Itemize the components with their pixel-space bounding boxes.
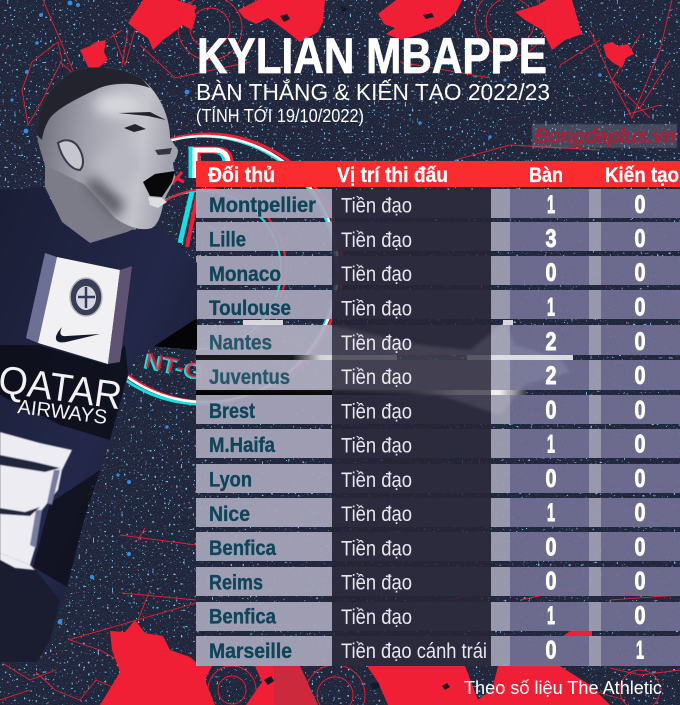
head (37, 67, 178, 229)
table row: Marseille: Tiền đạo cánh trái (341, 640, 487, 663)
table row: Benfica (second): Benfica (209, 606, 276, 628)
table row: Toulouse: Tiền đạo (341, 298, 412, 320)
shirt white stripe with folds (0, 432, 72, 570)
table row: Lille: Lille (209, 228, 246, 252)
table header: Bàn (529, 164, 563, 187)
table row: Nice: 1 (547, 499, 555, 527)
table row: Benfica (second) (196, 602, 680, 631)
table row: Nantes: 0 (634, 328, 646, 356)
table row: Benfica (second): 1 (547, 602, 555, 630)
PSG club logo with glitch effect: NT-G (143, 347, 207, 384)
table row: Montpellier: 0 (634, 191, 646, 219)
table row: Juventus: 0 (634, 362, 646, 390)
table row: Toulouse: Toulouse (209, 297, 291, 320)
player: Kylian Mbappe in PSG shirt (0, 67, 197, 662)
table row: Benfica (196, 532, 680, 562)
table row: Lyon: Lyon (209, 468, 252, 492)
shirt left stripe (26, 253, 57, 343)
table row: Lille: 0 (634, 225, 646, 253)
table row: Juventus (196, 360, 680, 390)
table row: Reims (196, 567, 680, 596)
table row: M.Haifa: M.Haifa (209, 434, 275, 457)
eye and brow (118, 112, 166, 132)
table row: Reims: Reims (209, 572, 263, 594)
table row: Toulouse (196, 290, 680, 322)
table row: Lyon: 0 (634, 465, 646, 493)
table row: Nantes: Tiền đạo (341, 332, 412, 355)
nose shadow (155, 148, 172, 155)
position column backing (332, 190, 491, 666)
shirt white panel (38, 257, 120, 364)
table row: Brest: 0 (634, 396, 646, 424)
table row: Monaco: 0 (546, 259, 556, 287)
date note: (TÍNH TỚI 19/10/2022) (196, 105, 364, 126)
table header (196, 161, 680, 187)
table row: Monaco: 0 (634, 259, 646, 287)
table row: Toulouse: 1 (547, 294, 555, 322)
table row: Nice: 0 (634, 499, 646, 527)
table row: Benfica (second): 0 (634, 602, 646, 630)
table row: Marseille: Marseille (209, 640, 292, 663)
table row: Toulouse: 0 (634, 294, 646, 322)
table row: Brest: Tiền đạo (341, 400, 412, 424)
PSG club logo with glitch effect: NT-G (141, 348, 205, 385)
player torso and shirt (0, 187, 197, 662)
PSG badge (70, 278, 102, 316)
Nike swoosh (56, 327, 100, 342)
table row: Nice: Nice (209, 503, 250, 526)
table row: M.Haifa (196, 429, 680, 458)
goalkeeper arm seen in gaps between rows (196, 320, 573, 395)
table row: Reims: Tiền đạo (341, 572, 412, 594)
table row: Juventus: Juventus (209, 366, 290, 389)
watermark: Bongdaplus.vn (534, 125, 676, 148)
table row: M.Haifa: 1 (547, 430, 555, 458)
table row: Lyon (196, 464, 680, 493)
table row: Marseille: 0 (546, 636, 556, 664)
table row: Juventus: Tiền đạo (341, 366, 412, 389)
subtitle: BÀN THẮNG & KIẾN TẠO 2022/23 (196, 78, 550, 105)
table row: Marseille (196, 636, 680, 666)
table row: Benfica: 0 (546, 534, 556, 562)
table row: Montpellier: Montpellier (209, 194, 316, 217)
sponsor: AIRWAYS: AIRWAYS (16, 396, 108, 429)
table row: Brest: Brest (209, 400, 255, 423)
table header: Đối thủ (208, 164, 275, 187)
face highlights (85, 93, 142, 218)
shirt right stripe (108, 266, 132, 364)
decoration: red splatters bottom (0, 528, 680, 705)
open mouth (143, 171, 175, 197)
table row: Benfica: Tiền đạo (341, 538, 412, 560)
table row: M.Haifa: Tiền đạo (341, 434, 412, 458)
table row: Nantes (196, 325, 680, 356)
table row: Lille (196, 222, 680, 253)
table row: Brest: 0 (546, 396, 556, 424)
table row: M.Haifa: 0 (634, 430, 646, 458)
table row: Montpellier: 1 (547, 191, 555, 219)
table row: Montpellier (196, 189, 680, 219)
table row: Lille: 3 (546, 225, 556, 253)
table row: Lille: Tiền đạo (341, 229, 412, 252)
table row: Benfica: 0 (634, 534, 646, 562)
title: KYLIAN MBAPPE (197, 28, 547, 84)
goalkeeper hand faintly visible through table (196, 322, 570, 415)
neck (45, 160, 150, 243)
table row: Montpellier: Tiền đạo (341, 194, 412, 218)
table row: Juventus: 2 (546, 362, 556, 390)
ear (58, 140, 83, 170)
table row: Lyon: 0 (546, 465, 556, 493)
table row: Benfica: Benfica (209, 537, 276, 560)
table row: Monaco: Tiền đạo (341, 263, 412, 286)
table row: Reims: 0 (546, 568, 556, 596)
table row: Nice: Tiền đạo (341, 503, 412, 526)
PSG club logo with glitch effect (68, 134, 342, 404)
table row: Monaco: Monaco (209, 263, 281, 286)
source note: Theo số liệu The Athletic (464, 677, 662, 698)
table row: Reims: 0 (634, 568, 646, 596)
table row: Nantes: 2 (546, 328, 556, 356)
black arm behind torso (150, 318, 197, 350)
table row: Nice (196, 498, 680, 527)
table row: Lyon: Tiền đạo (341, 469, 412, 492)
table row: Nantes: Nantes (209, 332, 272, 354)
decoration: red splatters top (22, 0, 672, 160)
table header: Vị trí thi đấu (337, 164, 448, 187)
table row: Monaco (196, 256, 680, 287)
hair (37, 67, 150, 140)
table row: Brest (196, 395, 680, 424)
table row: Marseille: 1 (636, 636, 644, 664)
table row: Benfica (second): Tiền đạo (341, 606, 412, 629)
